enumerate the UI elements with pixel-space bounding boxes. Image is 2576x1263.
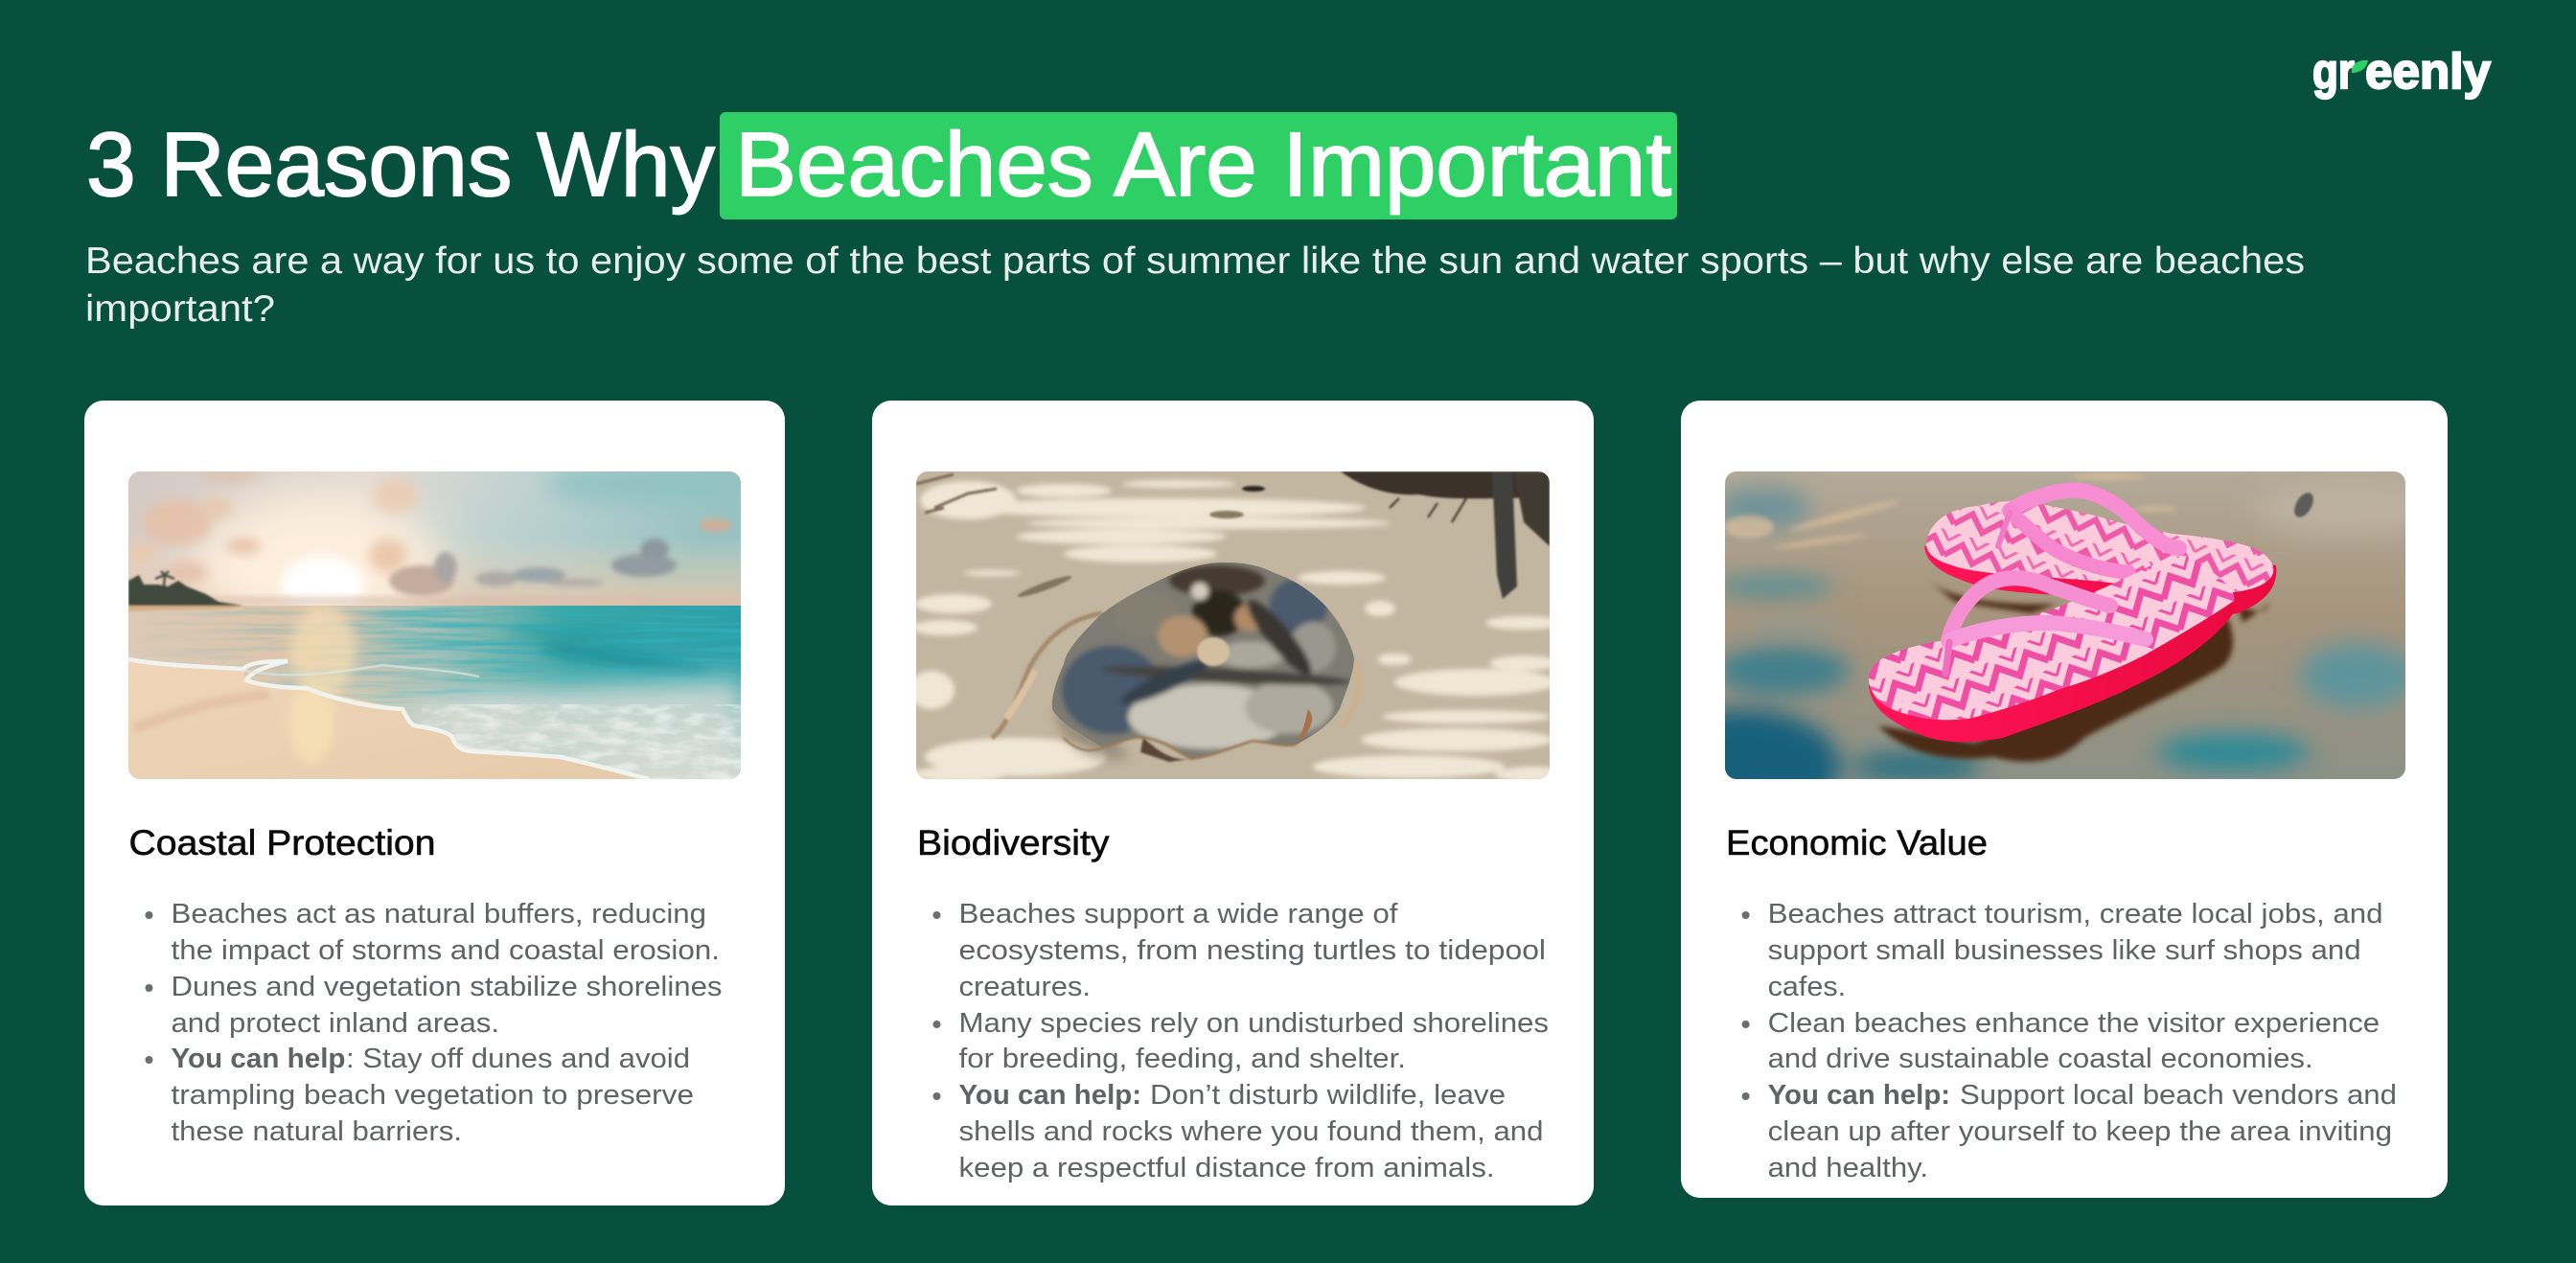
bullet list (933, 899, 1549, 1183)
subtitle: important? (85, 288, 275, 330)
bullet list: trampling beach vegetation to preserve (171, 1080, 694, 1111)
bullet list: and healthy. (1768, 1153, 1928, 1183)
bullet list: clean up after yourself to keep the area inviting (1768, 1116, 2392, 1147)
bullet list: Beaches support a wide range of (958, 899, 1399, 930)
shell shadow (1052, 709, 1131, 760)
bullet list: You can help: (1768, 1080, 1950, 1111)
bullet list: support small businesses like surf shops and (1768, 935, 2361, 966)
back flip-flop (1924, 491, 2276, 614)
bullet list: : Stay off dunes and avoid (346, 1044, 690, 1074)
panel: Coastal Protection (84, 401, 795, 1206)
title (86, 112, 1677, 219)
logo: greenly: eenly (2365, 44, 2491, 100)
bullet list: cafes. (1768, 972, 1846, 1002)
bullet list: shells and rocks where you found them, and (958, 1116, 1543, 1147)
logo: greenly (2312, 44, 2491, 100)
bullet list: Don’t disturb wildlife, leave (1150, 1080, 1506, 1111)
bullet list: and protect inland areas. (171, 1008, 499, 1039)
bullet list: Many species rely on undisturbed shorelines (958, 1008, 1549, 1039)
panel: Biodiversity (872, 401, 1594, 1206)
bullet list: ecosystems, from nesting turtles to tidepool (958, 935, 1546, 966)
bullet list: Support local beach vendors and (1960, 1080, 2397, 1111)
bullet list: You can help: (958, 1080, 1141, 1111)
photo: sunset beach (128, 471, 741, 779)
bullet list: for breeding, feeding, and shelter. (958, 1044, 1406, 1074)
photo: turtle shell on sand (908, 471, 1572, 782)
logo: greenly: gr (2312, 44, 2355, 100)
front flip-flop (1869, 556, 2236, 742)
bullet list: and drive sustainable coastal economies. (1768, 1044, 2313, 1074)
bullet list: the impact of storms and coastal erosion. (171, 935, 720, 966)
bullet list: Clean beaches enhance the visitor experience (1768, 1008, 2380, 1039)
bullet list: You can help (171, 1044, 345, 1074)
heading: Biodiversity (917, 823, 1110, 862)
bullet list: creatures. (958, 972, 1091, 1002)
panel: Economic Value (1648, 401, 2448, 1198)
bullet list: these natural barriers. (171, 1116, 462, 1147)
vegetation (916, 471, 1550, 738)
subtitle (85, 241, 2305, 330)
bullet list: keep a respectful distance from animals. (958, 1153, 1495, 1183)
shadows and reflections (1878, 582, 2269, 762)
shore foam zone (402, 680, 741, 779)
heading: Coastal Protection (128, 823, 435, 862)
subtitle: Beaches are a way for us to enjoy some of the best parts of summer like the sun and water sports – but why else are beaches (85, 241, 2305, 282)
shell (1052, 563, 1354, 759)
title highlight box (720, 112, 1677, 219)
title: Beaches Are Important (735, 114, 1671, 216)
photo: pink flip-flops on wet sand (1725, 471, 2405, 779)
icon: leaf on r (2352, 60, 2368, 73)
bullet list: Beaches act as natural buffers, reducing (171, 899, 706, 930)
title: 3 Reasons Why (86, 114, 715, 216)
bullet list (1742, 899, 2397, 1183)
heading: Economic Value (1726, 823, 1988, 862)
bullet list (146, 899, 723, 1147)
bullet list: Beaches attract tourism, create local jobs, and (1768, 899, 2383, 930)
bullet list: Dunes and vegetation stabilize shorelines (171, 972, 723, 1002)
